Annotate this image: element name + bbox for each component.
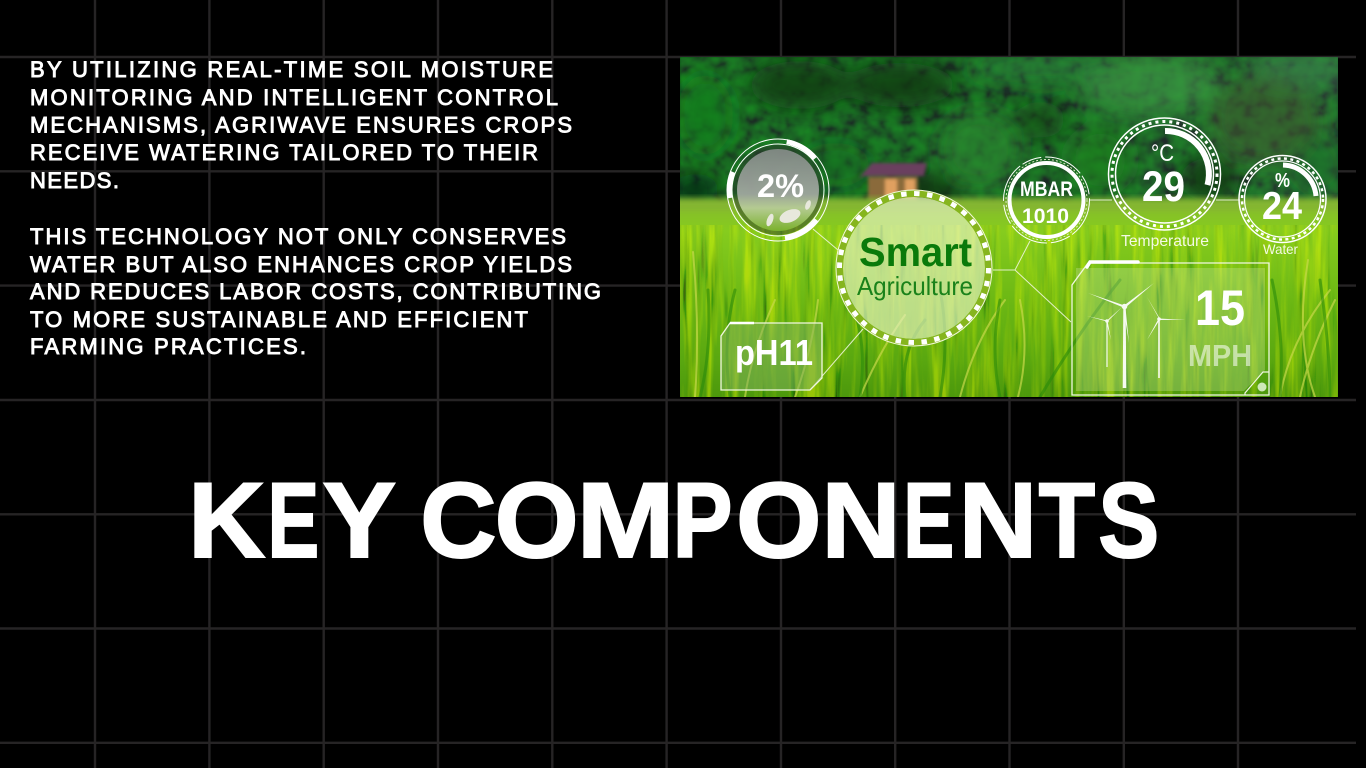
paragraph 2: THIS TECHNOLOGY NOT ONLY CONSERVES <box>30 224 566 249</box>
paragraph 1: MECHANISMS, AGRIWAVE ENSURES CROPS <box>30 112 572 138</box>
panel: smart agriculture photo <box>670 52 1350 397</box>
gauge: temperature: °C <box>1151 140 1174 167</box>
paragraph 2: AND REDUCES LABOR COSTS, CONTRIBUTING <box>30 279 601 304</box>
callout: pH11 <box>721 323 822 390</box>
gauge: temperature: 29 <box>1142 163 1185 211</box>
gauge: water: % <box>1275 170 1290 192</box>
callout: wind speed <box>1072 262 1269 395</box>
gauge: water <box>1239 156 1326 257</box>
title: P <box>672 460 732 580</box>
gauge: temperature: Temperature <box>1121 233 1209 250</box>
gauge: 2% pest: 2% <box>757 168 804 204</box>
callout: pH11: pH11 <box>735 332 813 373</box>
gauge: MBAR 1010: 1010 <box>1022 205 1069 228</box>
gauge: temperature <box>1108 118 1220 250</box>
title: N <box>822 460 900 580</box>
callout: wind speed: 15 <box>1195 280 1245 336</box>
title: S <box>1098 460 1159 580</box>
house <box>859 163 927 203</box>
gauge: MBAR 1010 <box>1004 157 1090 243</box>
text block: description <box>30 57 601 359</box>
title: E <box>268 460 319 580</box>
paragraph 1: RECEIVE WATERING TAILORED TO THEIR <box>30 140 538 165</box>
title: C <box>420 460 496 580</box>
gauge: smart agriculture <box>836 190 992 346</box>
paragraph 1: NEEDS. <box>30 168 119 193</box>
gauge: MBAR 1010: MBAR <box>1020 178 1073 201</box>
paragraph 2: TO MORE SUSTAINABLE AND EFFICIENT <box>30 307 528 332</box>
gauge: water: Water <box>1263 241 1298 257</box>
paragraph 2 <box>30 224 601 359</box>
paragraph 1: MONITORING AND INTELLIGENT CONTROL <box>30 85 558 110</box>
paragraph 1 <box>30 57 572 193</box>
paragraph 2: FARMING PRACTICES. <box>30 334 306 359</box>
title: K <box>188 460 265 580</box>
title: Y <box>323 460 395 580</box>
gauge: smart agriculture: Agriculture <box>857 271 973 301</box>
title: O <box>736 460 822 580</box>
title: N <box>959 460 1037 580</box>
title: O <box>495 460 579 580</box>
connector lines <box>810 200 1240 390</box>
gauge: smart agriculture: Smart <box>859 229 972 275</box>
gauge: 2% pest <box>727 139 829 241</box>
paragraph 1: BY UTILIZING REAL-TIME SOIL MOISTURE <box>30 57 553 82</box>
title: E <box>903 460 954 580</box>
title: M <box>577 460 675 580</box>
gauge: water: 24 <box>1262 185 1302 228</box>
title: T <box>1039 460 1095 580</box>
callout: wind speed: MPH <box>1188 338 1252 373</box>
pest icon <box>765 199 812 227</box>
icon: wind turbines <box>1087 283 1186 388</box>
grass blades <box>693 252 1335 397</box>
photo scenery <box>670 52 1350 397</box>
paragraph 2: WATER BUT ALSO ENHANCES CROP YIELDS <box>30 252 572 277</box>
